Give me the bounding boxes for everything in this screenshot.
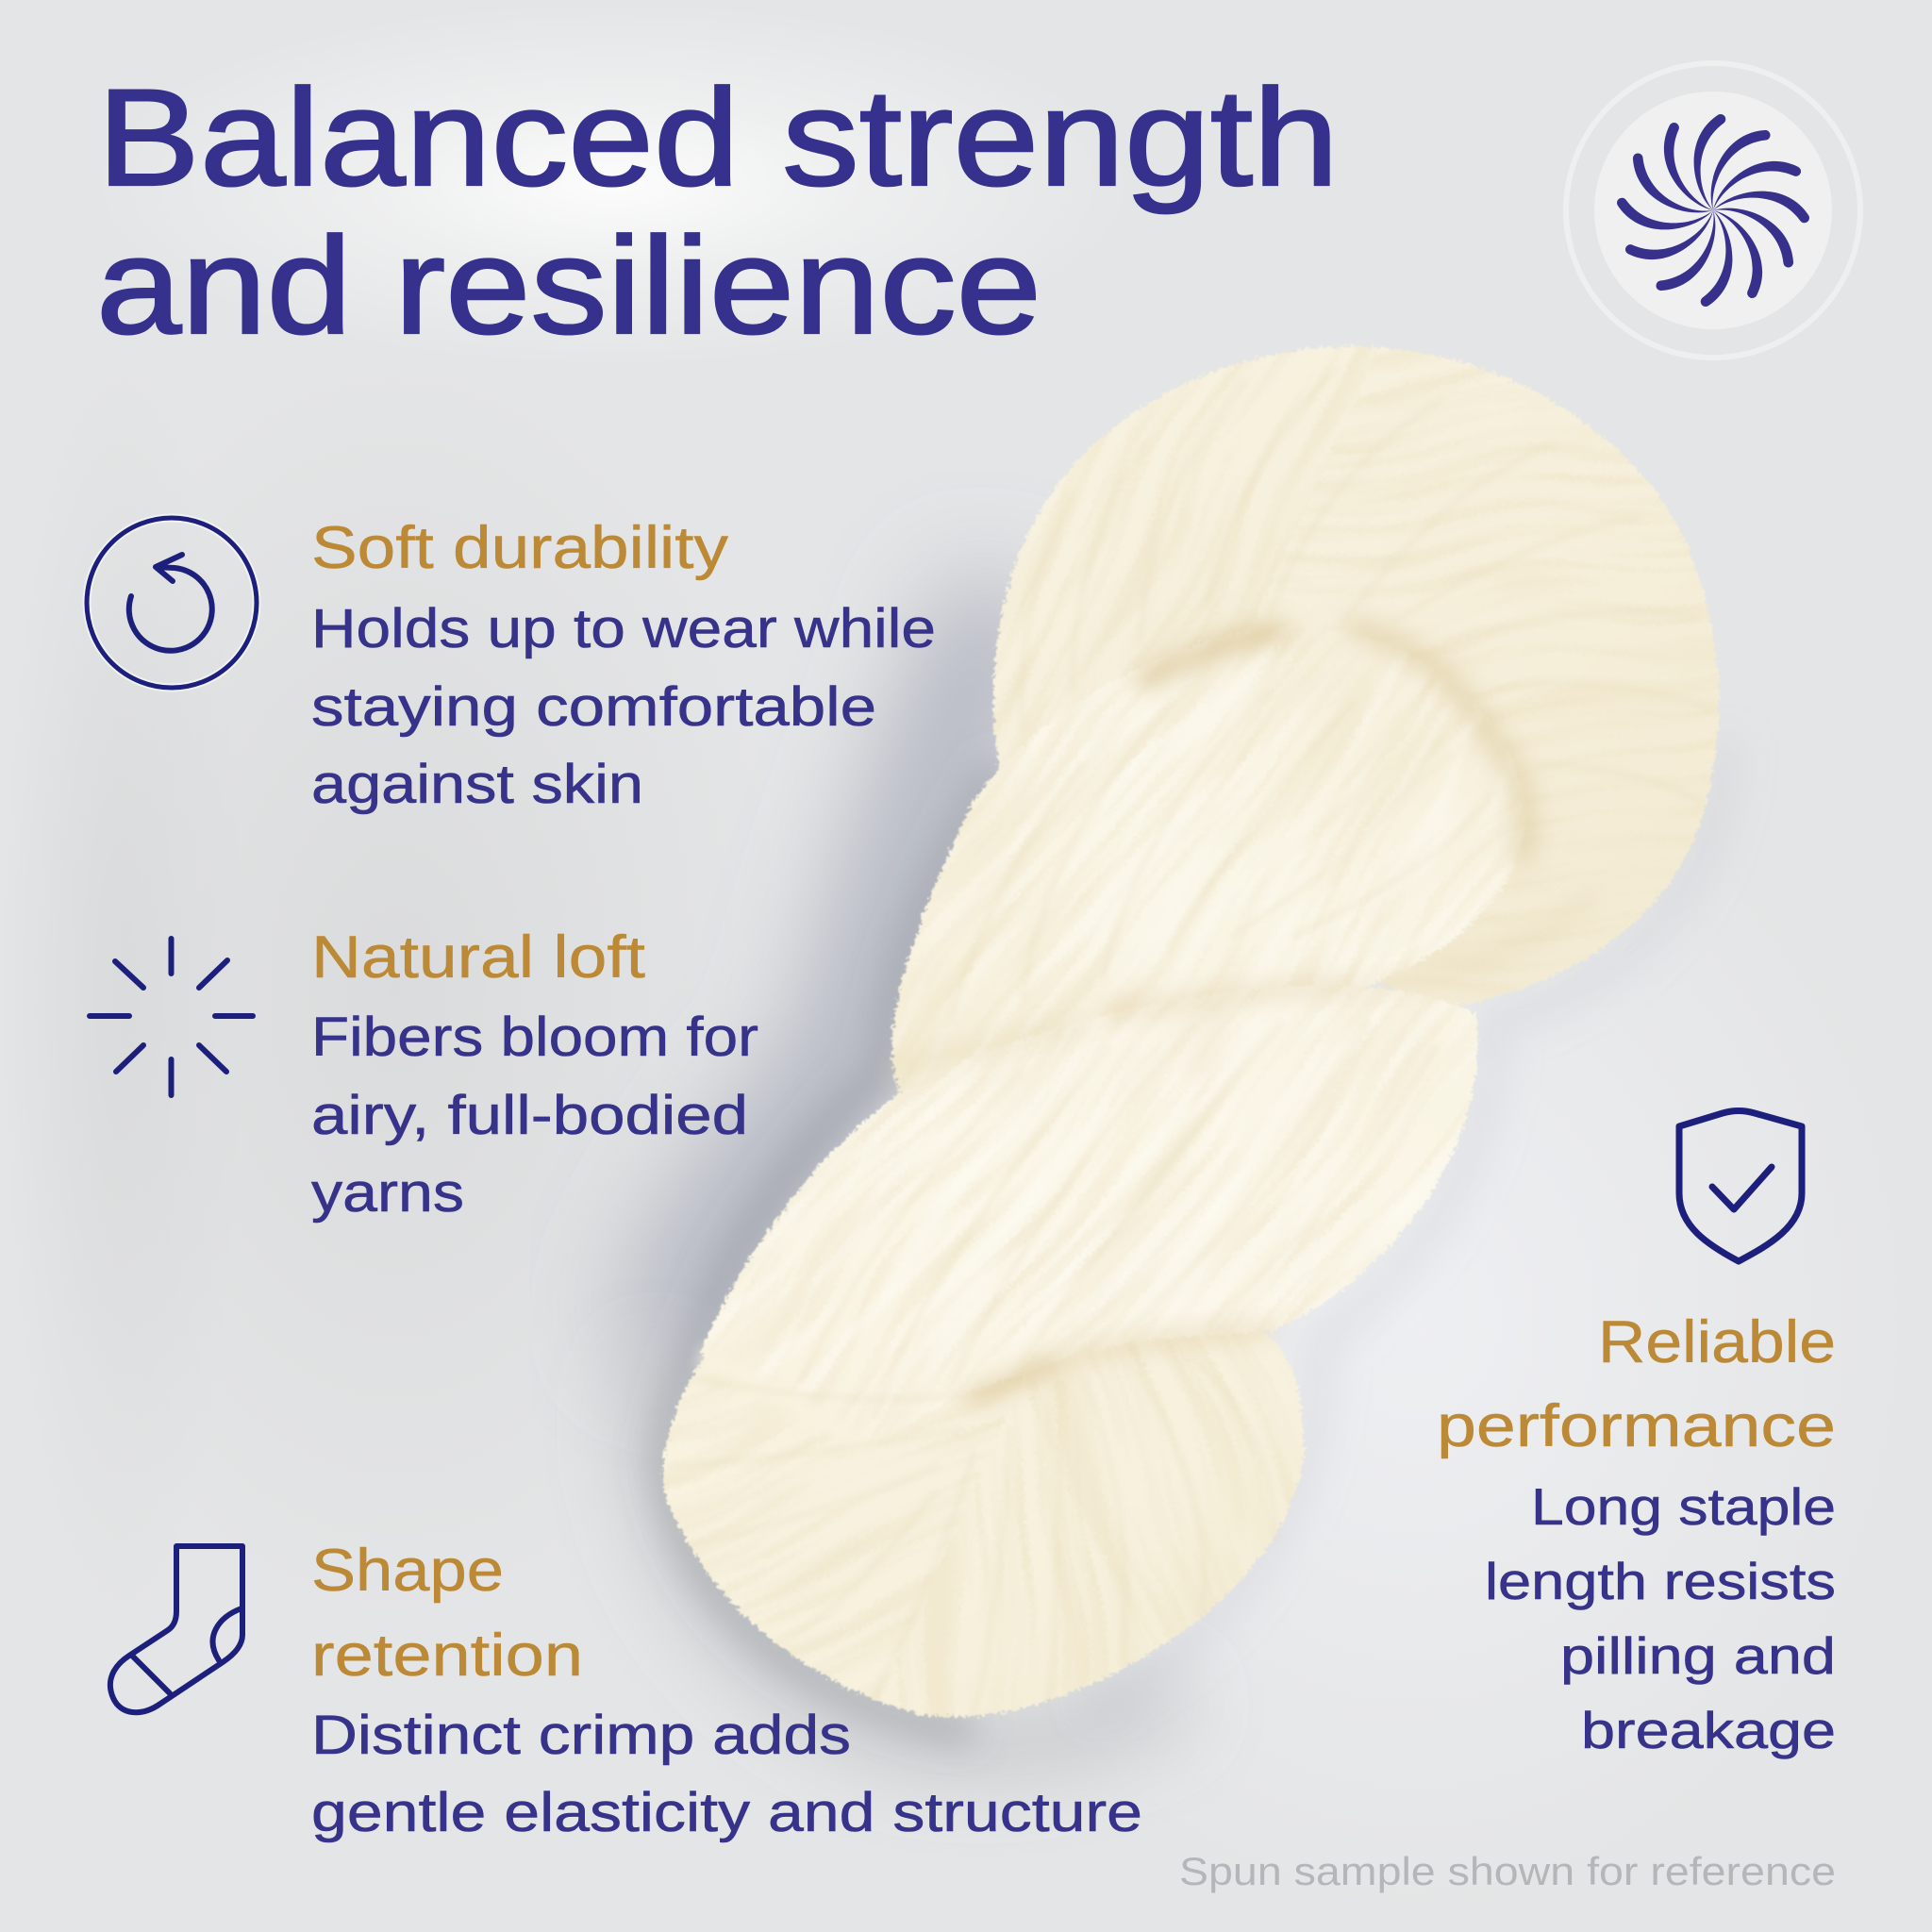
heading: performance — [1437, 1393, 1836, 1459]
logo badge: swirl — [1566, 63, 1860, 358]
title: and resilience — [96, 208, 1041, 362]
third twist band — [699, 985, 1480, 1426]
feature: reliable performance — [1437, 1111, 1836, 1759]
feature: shape retention — [110, 1538, 1142, 1843]
title — [96, 60, 1339, 362]
description: gentle elasticity and structure — [311, 1782, 1142, 1843]
feature: natural loft — [90, 924, 758, 1224]
icon: shield with check — [1679, 1111, 1802, 1261]
description — [1485, 1477, 1836, 1759]
upper loop of skein — [991, 343, 1721, 1007]
description: pilling and — [1560, 1626, 1836, 1685]
heading: retention — [311, 1623, 583, 1689]
heading: Reliable — [1598, 1309, 1836, 1375]
second twist band — [889, 630, 1524, 1096]
description — [311, 1007, 758, 1224]
icon: burst — [90, 939, 253, 1095]
heading — [1437, 1309, 1836, 1459]
title: Balanced strength — [97, 60, 1339, 214]
feature: soft durability — [87, 515, 936, 815]
description — [311, 598, 936, 815]
description: staying comfortable — [311, 676, 876, 738]
description: Distinct crimp adds — [311, 1705, 851, 1766]
description — [311, 1705, 1142, 1843]
icon: sock — [110, 1546, 242, 1712]
lower loop of skein — [659, 1329, 1307, 1719]
icon: circular arrow — [87, 518, 257, 688]
yarn skein photo — [458, 161, 1886, 1856]
description: length resists — [1485, 1552, 1836, 1610]
heading: Shape — [311, 1538, 504, 1604]
heading: Natural loft — [311, 924, 646, 991]
heading — [311, 1538, 583, 1689]
crease shading — [893, 628, 1590, 1398]
description: breakage — [1581, 1701, 1836, 1759]
description: Fibers bloom for — [311, 1007, 758, 1068]
description: yarns — [311, 1162, 464, 1224]
footnote: Spun sample shown for reference — [1179, 1849, 1836, 1893]
heading: Soft durability — [311, 515, 729, 581]
swirl arms — [1615, 112, 1811, 308]
description: Holds up to wear while — [311, 598, 936, 659]
seam softening — [702, 1356, 869, 1448]
description: airy, full-bodied — [311, 1085, 748, 1146]
cast shadow — [655, 591, 1725, 1746]
description: Long staple — [1531, 1477, 1836, 1536]
wool strands — [672, 370, 1712, 1715]
description: against skin — [311, 754, 643, 815]
